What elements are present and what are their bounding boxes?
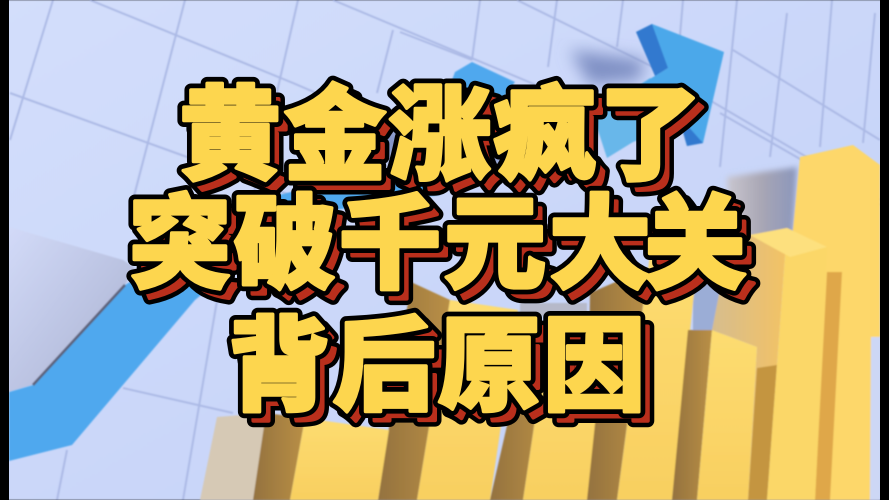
arrow shaft	[9, 62, 515, 461]
title line 1: 黄金涨疯了	[188, 88, 710, 202]
title line 3: 背后原因	[228, 310, 645, 424]
title line 2: 突破千元大关	[138, 197, 755, 311]
blue trend arrow	[9, 24, 724, 461]
arrow head	[636, 24, 724, 146]
title line 2: 突破千元大关	[129, 188, 746, 302]
arrow head side	[636, 24, 703, 146]
gold bar chart	[200, 145, 880, 500]
pale gap tints	[520, 303, 587, 316]
arrow shaft upper section	[593, 78, 680, 158]
title line 3: 背后原因	[237, 319, 654, 433]
title line 3: 背后原因	[228, 310, 645, 424]
title line 1: 黄金涨疯了	[188, 88, 710, 202]
raised plate, upper left	[9, 227, 135, 392]
title line 2: 突破千元大关	[138, 197, 755, 311]
bar 1	[200, 413, 389, 500]
title line 3: 背后原因	[237, 319, 654, 433]
arrow shaft edge	[33, 285, 125, 385]
bar 4	[587, 255, 697, 500]
bar 3	[490, 320, 606, 500]
bar 5	[672, 330, 757, 500]
bar 6	[712, 228, 827, 500]
title line 1: 黄金涨疯了	[179, 79, 701, 193]
arrow shadows	[375, 50, 645, 165]
title line 1: 黄金涨疯了	[179, 79, 701, 193]
bar 7 tall	[767, 145, 880, 500]
tall back bar shadow	[727, 167, 797, 240]
title line 2: 突破千元大关	[129, 188, 746, 302]
bar 2	[378, 282, 518, 500]
title	[129, 79, 755, 433]
